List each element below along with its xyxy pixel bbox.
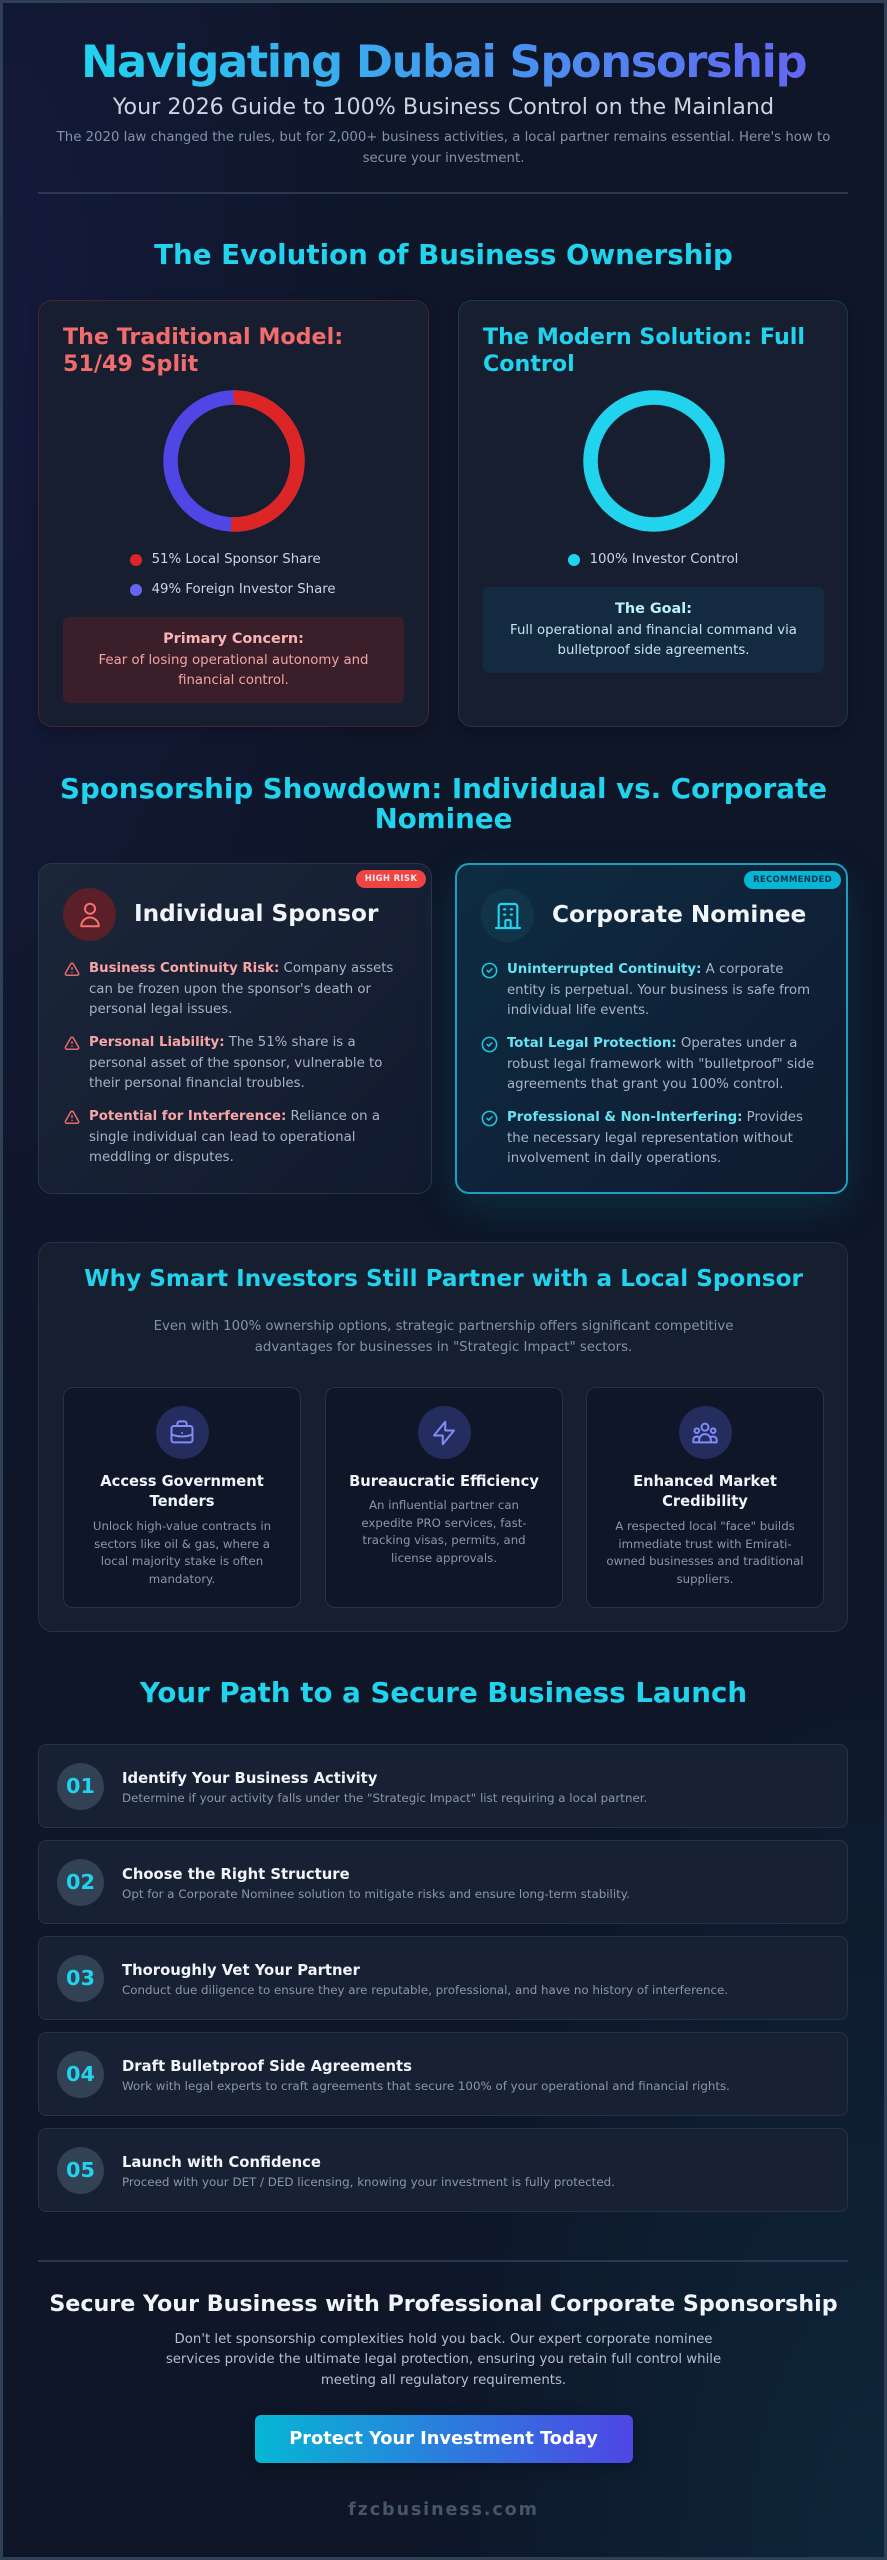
card: government tenders <box>63 1387 301 1608</box>
credibility text: suppliers. <box>677 1572 733 1586</box>
step 4 <box>38 2032 848 2116</box>
benefit item: continuity: entity is perpetual. Your business is safe from <box>507 983 810 998</box>
step 3 title: Thoroughly Vet Your Partner <box>122 1962 360 1978</box>
tenders text <box>93 1519 271 1586</box>
efficiency text <box>361 1498 527 1565</box>
callout: primary concern: Primary Concern: <box>163 631 304 647</box>
badge: recommended <box>744 871 841 889</box>
legend: investor control: 100% Investor Control <box>590 552 738 567</box>
tenders title <box>100 1472 264 1510</box>
badge: high risk: HIGH RISK <box>365 874 417 884</box>
legend: foreign investor: 49% Foreign Investor Share <box>152 582 336 597</box>
number 03: 03 <box>66 1966 95 1990</box>
number 01: 01 <box>66 1774 95 1798</box>
button: protect your investment <box>254 2415 632 2463</box>
step 1 title: Identify Your Business Activity <box>122 1770 377 1786</box>
step 1 <box>38 1744 848 1828</box>
tenders title: Access Government <box>100 1472 264 1490</box>
benefit item: protection <box>482 1036 814 1092</box>
risk item: liability: Personal Liability: The 51% share is a <box>89 1035 356 1050</box>
modern heading: Control <box>483 351 575 377</box>
risk item: interference <box>64 1109 380 1165</box>
benefit item: continuity <box>482 962 810 1018</box>
heading: showdown <box>60 772 827 835</box>
number 05: 05 <box>66 2158 95 2182</box>
card: bureaucratic efficiency <box>325 1387 563 1608</box>
step 4 title: Draft Bulletproof Side Agreements <box>122 2058 412 2074</box>
efficiency text: An influential partner can <box>369 1498 519 1512</box>
credibility title <box>633 1472 777 1510</box>
tenders text: mandatory. <box>149 1572 215 1586</box>
risk item: continuity: can be frozen upon the sponsor's death or <box>89 982 371 997</box>
efficiency text: license approvals. <box>391 1551 497 1565</box>
step 2 text: Opt for a Corporate Nominee solution to mitigate risks and ensure long-term stability. <box>122 1886 630 1900</box>
why partner intro: Even with 100% ownership options, strategic partnership offers significant competitive <box>154 1319 733 1334</box>
callout: the goal: Full operational and financial command via <box>510 622 797 638</box>
benefit item: continuity: individual life events. <box>507 1003 649 1018</box>
icon: people group <box>678 1406 732 1459</box>
intro text <box>56 130 830 166</box>
heading: path: Your Path to a Secure Business Launch <box>140 1676 747 1709</box>
benefit item: protection: robust legal framework with "bulletproof" side <box>507 1057 814 1072</box>
card: market credibility <box>586 1387 824 1608</box>
callout: the goal: The Goal: <box>615 601 692 617</box>
number 05 <box>57 2147 104 2194</box>
step 1 text: Determine if your activity falls under the "Strategic Impact" list requiring a local partner. <box>122 1790 647 1804</box>
intro text: The 2020 law changed the rules, but for 2,000+ business activities, a local partner remains essential. Here's how to <box>57 130 830 145</box>
heading: showdown: Sponsorship Showdown: Individual vs. Corporate <box>60 772 827 805</box>
risk item: liability: their personal financial troubles. <box>89 1076 305 1091</box>
credibility title: Enhanced Market <box>633 1472 777 1490</box>
why partner intro <box>154 1319 733 1355</box>
number 04: 04 <box>66 2062 95 2086</box>
icon: building <box>481 889 534 942</box>
icon: user <box>63 888 116 941</box>
footer: website: fzcbusiness.com <box>348 2500 539 2520</box>
donut chart: 51/49 <box>163 390 305 532</box>
risk item: liability <box>64 1035 382 1091</box>
number 01 <box>57 1763 104 1810</box>
traditional heading: 51/49 Split <box>63 351 198 377</box>
risk item: liability: personal asset of the sponsor, vulnerable to <box>89 1056 382 1071</box>
icon: briefcase <box>156 1406 208 1459</box>
credibility text: immediate trust with Emirati- <box>618 1537 792 1551</box>
traditional heading <box>63 324 343 377</box>
number 04 <box>57 2051 104 2098</box>
step 4 text: Work with legal experts to craft agreements that secure 100% of your operational and financial rights. <box>122 2078 730 2092</box>
icon: lightning bolt <box>418 1406 470 1459</box>
panel: corporate nominee <box>455 863 848 1194</box>
benefit item: continuity: Uninterrupted Continuity: A corporate <box>507 962 783 977</box>
benefit item: non-interfering: the necessary legal representation without <box>507 1131 793 1146</box>
tenders text: Unlock high-value contracts in <box>93 1519 271 1533</box>
panel: traditional model <box>38 300 429 727</box>
tenders title: Tenders <box>150 1493 214 1510</box>
benefit item: non-interfering <box>482 1110 803 1166</box>
benefit item: protection: Total Legal Protection: Operates under a <box>507 1036 797 1051</box>
badge: recommended: RECOMMENDED <box>753 875 832 885</box>
call to action text: services provide the ultimate legal protection, ensuring you retain full control while <box>166 2352 721 2367</box>
callout: primary concern: financial control. <box>178 673 289 688</box>
benefit item: protection: agreements that grant you 100% control. <box>507 1077 783 1092</box>
efficiency text: tracking visas, permits, and <box>362 1533 526 1547</box>
why partner intro: advantages for businesses in "Strategic Impact" sectors. <box>255 1340 632 1355</box>
button: protect your investment: Protect Your Investment Today <box>289 2428 598 2449</box>
step 2 title: Choose the Right Structure <box>122 1866 350 1882</box>
benefit item: non-interfering: involvement in daily operations. <box>507 1151 721 1166</box>
number 02: 02 <box>66 1870 95 1894</box>
modern heading: The Modern Solution: Full <box>483 324 805 350</box>
callout: the goal: bulletproof side agreements. <box>558 643 749 658</box>
donut chart: 100% <box>583 390 725 532</box>
call to action text <box>166 2332 721 2388</box>
heading: why partner: Why Smart Investors Still Partner with a Local Sponsor <box>84 1266 803 1292</box>
panel: individual sponsor <box>38 863 432 1194</box>
step 2 <box>38 1840 848 1924</box>
credibility text <box>606 1519 804 1586</box>
title: Navigating Dubai Sponsorship <box>81 35 806 88</box>
credibility title: Credibility <box>662 1493 748 1510</box>
heading: evolution: The Evolution of Business Ownership <box>154 238 733 271</box>
step 5 <box>38 2128 848 2212</box>
call to action text: meeting all regulatory requirements. <box>321 2373 566 2388</box>
tenders text: sectors like oil & gas, where a <box>94 1537 270 1551</box>
number 03 <box>57 1955 104 2002</box>
risk item: interference: Potential for Interference: Reliance on a <box>89 1109 380 1124</box>
call to action text: Don't let sponsorship complexities hold you back. Our expert corporate nominee <box>175 2332 712 2346</box>
panel: why partner <box>38 1242 848 1632</box>
callout: primary concern <box>63 617 404 703</box>
risk item: interference: single individual can lead to operational <box>89 1130 355 1145</box>
legend: local sponsor: 51% Local Sponsor Share <box>152 552 321 567</box>
number 02 <box>57 1859 104 1906</box>
risk item: continuity: Business Continuity Risk: Company assets <box>89 961 393 976</box>
panel: modern solution <box>458 300 848 727</box>
step 3 <box>38 1936 848 2020</box>
intro text: secure your investment. <box>363 151 524 166</box>
step 3 text: Conduct due diligence to ensure they are reputable, professional, and have no history of interference. <box>122 1982 728 1996</box>
efficiency title: Bureaucratic Efficiency <box>349 1472 539 1490</box>
corporate heading: Corporate Nominee <box>552 901 806 928</box>
heading: showdown: Nominee <box>375 802 512 835</box>
badge: high risk <box>356 870 426 888</box>
individual heading: Individual Sponsor <box>134 900 378 927</box>
step 5 text: Proceed with your DET / DED licensing, knowing your investment is fully protected. <box>122 2174 615 2188</box>
efficiency text: expedite PRO services, fast- <box>361 1516 527 1530</box>
traditional heading: The Traditional Model: <box>63 324 343 350</box>
credibility text: owned businesses and traditional <box>606 1554 804 1568</box>
risk item: continuity: personal legal issues. <box>89 1002 232 1017</box>
risk item: continuity <box>64 961 393 1017</box>
callout: primary concern: Fear of losing operational autonomy and <box>98 652 368 668</box>
modern heading <box>483 324 805 377</box>
callout: the goal <box>483 587 824 673</box>
risk item: interference: meddling or disputes. <box>89 1150 234 1165</box>
subtitle: Your 2026 Guide to 100% Business Control on the Mainland <box>113 94 774 120</box>
tenders text: local majority stake is often <box>101 1554 263 1568</box>
benefit item: non-interfering: Professional & Non-Interfering: Provides <box>507 1110 803 1125</box>
credibility text: A respected local "face" builds <box>615 1519 795 1533</box>
step 5 title: Launch with Confidence <box>122 2154 321 2170</box>
heading: call to action: Secure Your Business with Professional Corporate Sponsorship <box>49 2291 838 2317</box>
